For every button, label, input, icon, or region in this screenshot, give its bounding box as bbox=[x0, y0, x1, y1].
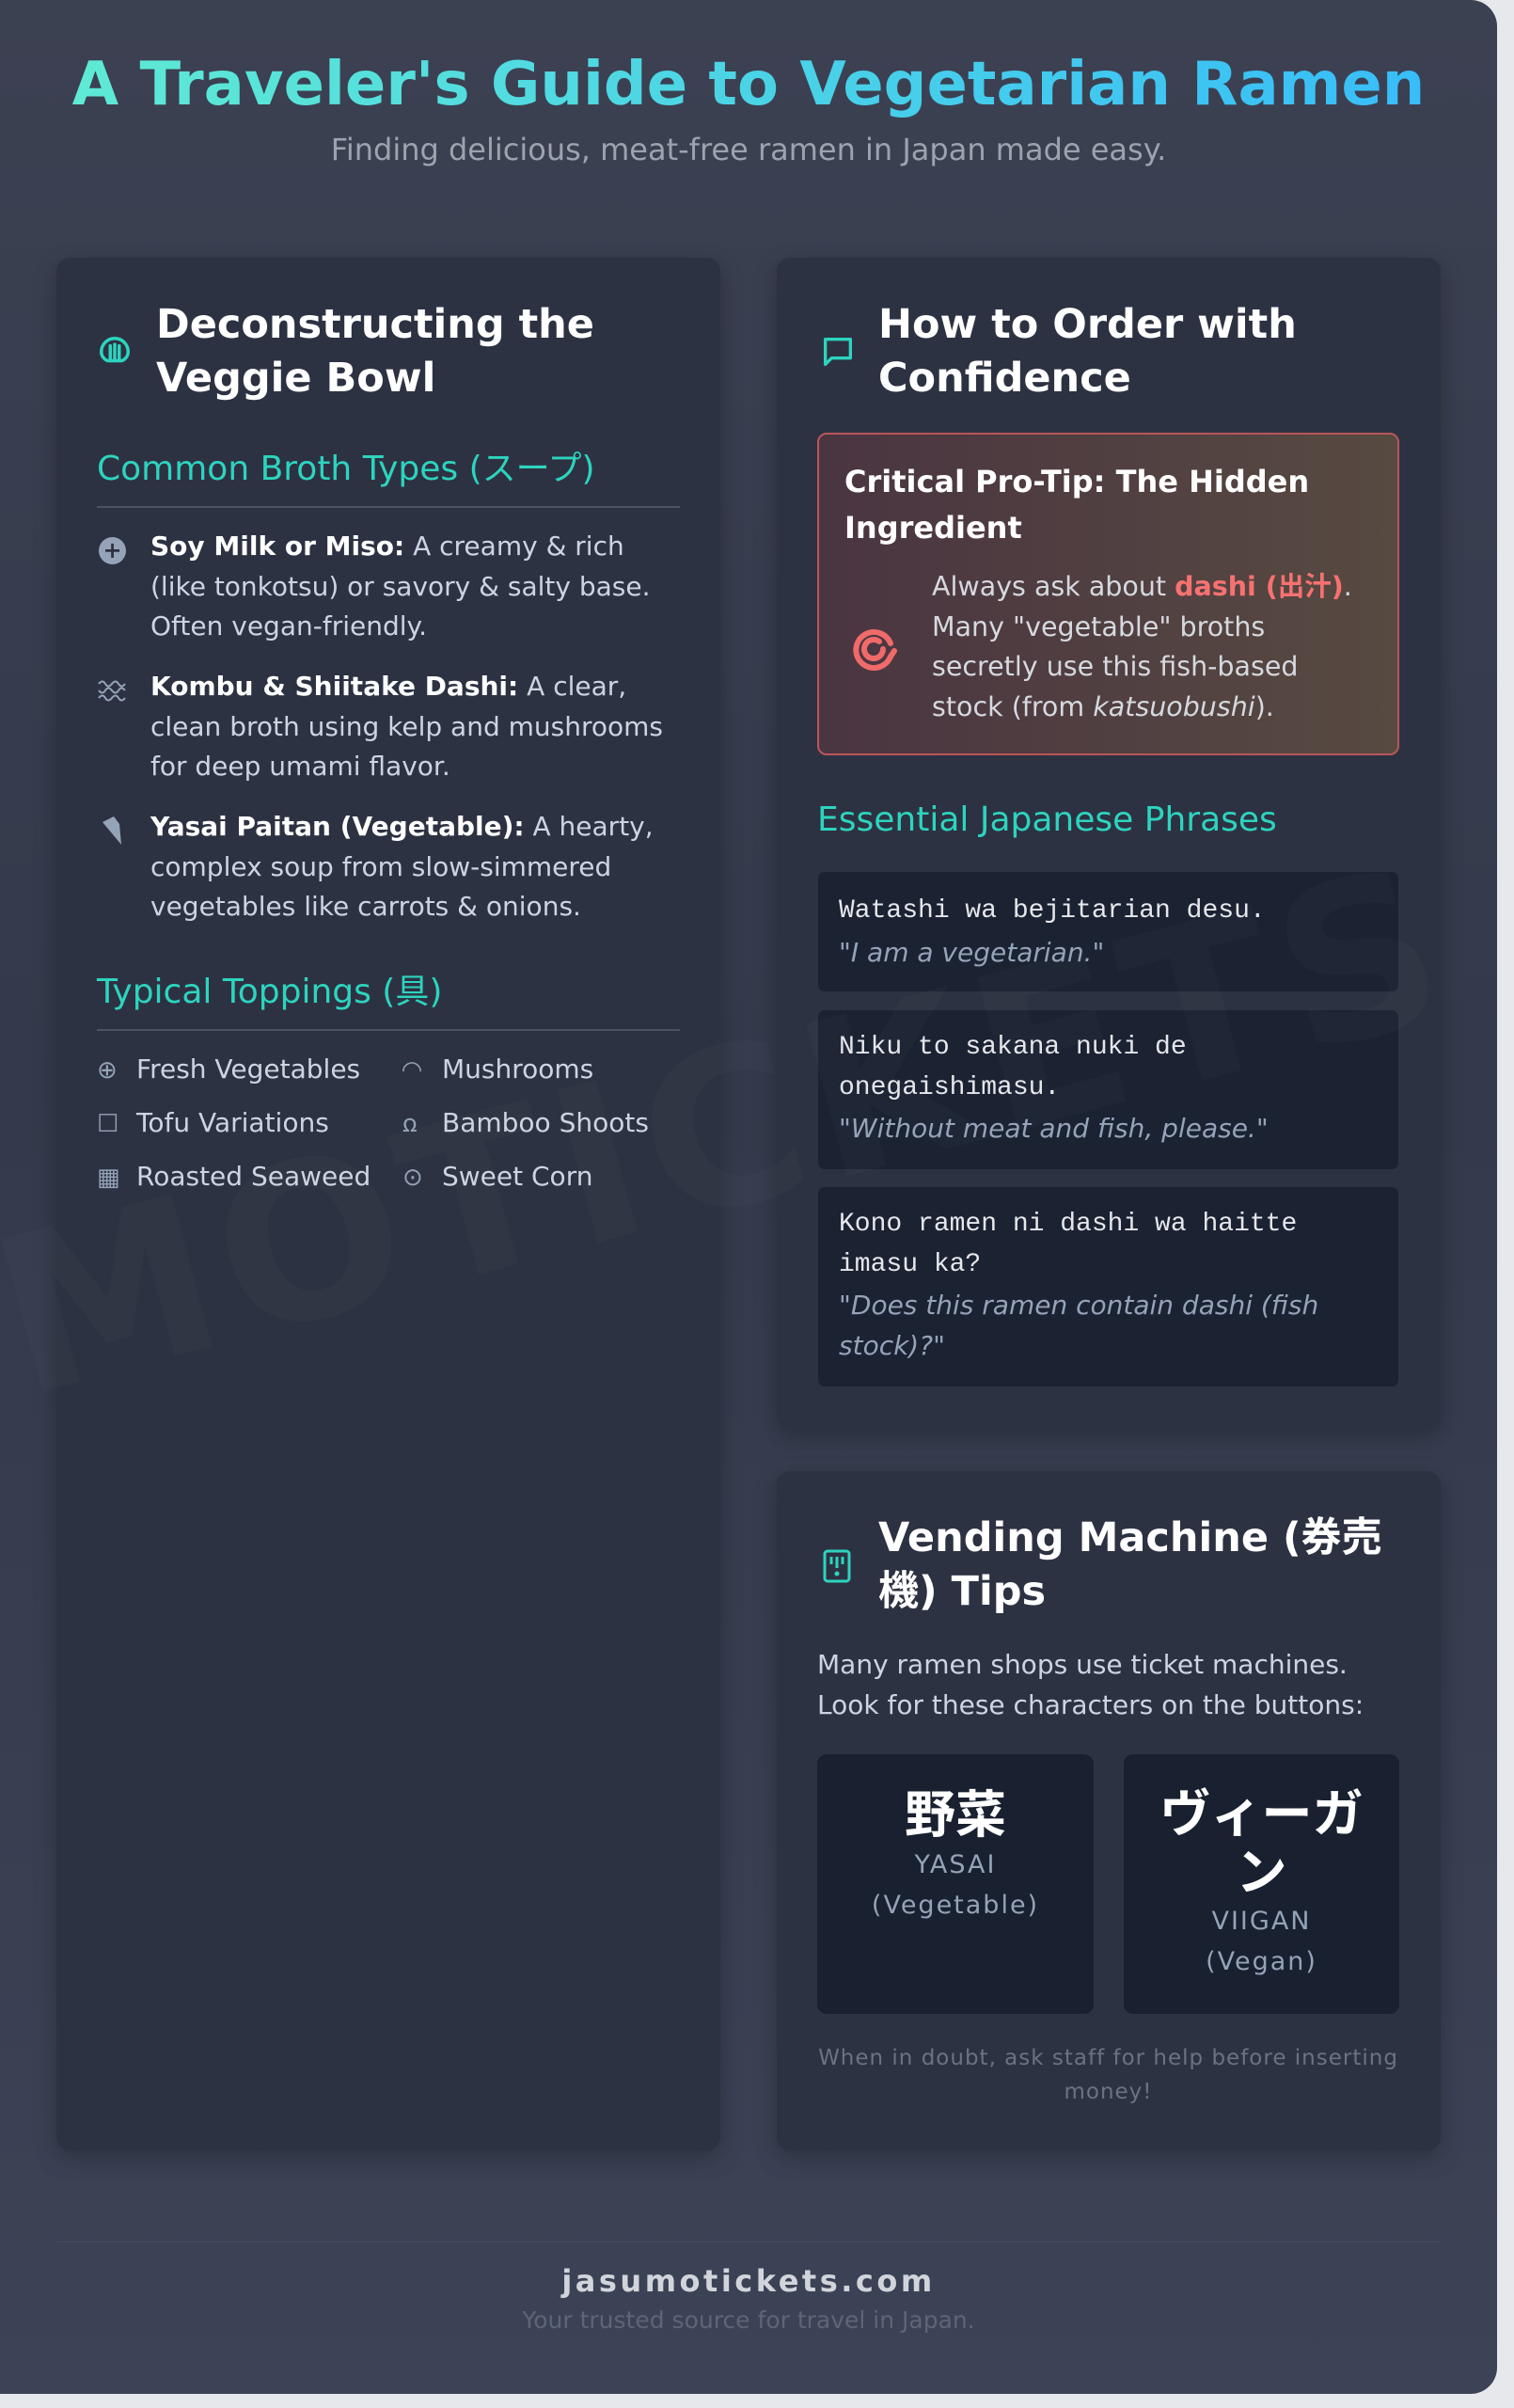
phrase 3: "Does this ramen contain dashi (fish bbox=[839, 1290, 1318, 1321]
topping: tofu: ☐ bbox=[97, 1110, 118, 1138]
topping: seaweed: ▦ bbox=[97, 1164, 120, 1192]
broth: soy milk: Soy Milk or Miso: A creamy & rich bbox=[150, 531, 624, 562]
broth: yasai paitan: complex soup from slow-simmered bbox=[150, 850, 611, 882]
callout title bbox=[844, 464, 1309, 546]
footer: jasumotickets.com bbox=[561, 2263, 936, 2299]
callout body: stock (from katsuobushi). bbox=[932, 690, 1274, 722]
heading: Confidence bbox=[878, 355, 1131, 402]
intro text: Look for these characters on the buttons: bbox=[817, 1689, 1364, 1719]
broth: yasai paitan: vegetables like carrots & onions. bbox=[150, 891, 581, 922]
icon: plus circle bbox=[99, 537, 126, 564]
topping: fresh vegetables: ⊕ bbox=[97, 1056, 118, 1085]
footnote: When in doubt, ask staff for help before inserting money! bbox=[818, 2046, 1398, 2104]
card: vegan bbox=[1124, 1754, 1399, 2014]
subtitle: Finding delicious, meat-free ramen in Japan made easy. bbox=[331, 132, 1166, 167]
subheading: toppings: Typical Toppings (具) bbox=[97, 973, 442, 1011]
callout: pro tip bbox=[817, 433, 1399, 755]
topping: corn: Sweet Corn bbox=[442, 1161, 592, 1192]
broth: kombu: for deep umami flavor. bbox=[150, 751, 450, 782]
phrase 2: onegaishimasu. bbox=[839, 1073, 1060, 1102]
toppings grid bbox=[97, 1054, 649, 1192]
callout body: Always ask about dashi (出汁). bbox=[932, 571, 1352, 602]
heading: 機) Tips bbox=[878, 1568, 1046, 1615]
broth: yasai paitan bbox=[103, 811, 654, 922]
heading: How to Order with bbox=[878, 301, 1297, 348]
phrase 1 bbox=[817, 871, 1399, 992]
topping: mushrooms: Mushrooms bbox=[442, 1054, 593, 1085]
intro text: Many ramen shops use ticket machines. bbox=[817, 1649, 1348, 1680]
phrase 2 bbox=[817, 1009, 1399, 1170]
broth: soy milk: (like tonkotsu) or savory & salty base. bbox=[150, 570, 651, 602]
phrase 1: Watashi wa bejitarian desu. bbox=[839, 896, 1266, 926]
heading bbox=[878, 301, 1297, 402]
broth: kombu: Kombu & Shiitake Dashi: A clear, bbox=[150, 671, 626, 702]
card: yasai bbox=[817, 1754, 1094, 2014]
broth list bbox=[98, 531, 663, 922]
topping: bamboo: Bamboo Shoots bbox=[442, 1107, 649, 1138]
footer: Your trusted source for travel in Japan. bbox=[522, 2306, 975, 2334]
phrase 3 bbox=[817, 1186, 1399, 1387]
subheading: broth types: Common Broth Types (スープ) bbox=[97, 450, 595, 488]
icon: leaf bbox=[103, 816, 121, 845]
icon: plus circle: + bbox=[103, 537, 122, 563]
heading: Veggie Bowl bbox=[156, 355, 435, 402]
icon: swirl bbox=[853, 629, 897, 671]
card: vegan: ヴィーガ bbox=[1160, 1772, 1364, 1846]
broth: yasai paitan: Yasai Paitan (Vegetable): A hearty, bbox=[150, 811, 654, 842]
topping: fresh vegetables: Fresh Vegetables bbox=[136, 1054, 360, 1085]
icon: speech bubble bbox=[824, 338, 852, 367]
card: yasai: 野菜 bbox=[905, 1773, 1006, 1847]
heading bbox=[878, 1514, 1382, 1615]
intro text bbox=[817, 1649, 1364, 1719]
icon: bowl bbox=[100, 337, 130, 363]
callout body bbox=[932, 571, 1352, 722]
card: vegan: (Vegan) bbox=[1206, 1947, 1317, 1976]
panel: how to order bbox=[777, 258, 1441, 1429]
broth: soy milk: Often vegan-friendly. bbox=[150, 610, 427, 642]
card: vegan: ン bbox=[1236, 1830, 1286, 1905]
heading bbox=[156, 301, 594, 402]
card: yasai: (Vegetable) bbox=[872, 1891, 1039, 1920]
footer bbox=[522, 2263, 975, 2334]
topping: tofu: Tofu Variations bbox=[136, 1107, 329, 1138]
card: vegan: VIIGAN bbox=[1211, 1907, 1311, 1936]
phrase 2: Niku to sakana nuki de bbox=[839, 1033, 1187, 1062]
phrase 2: "Without meat and fish, please." bbox=[839, 1113, 1269, 1144]
heading: Vending Machine (券売 bbox=[878, 1514, 1382, 1561]
panel: deconstructing the veggie bowl bbox=[56, 258, 720, 2150]
callout body: secretly use this fish-based bbox=[932, 651, 1298, 682]
phrase 3: stock)?" bbox=[839, 1330, 945, 1361]
topping: seaweed: Roasted Seaweed bbox=[136, 1161, 371, 1192]
phrase 3: Kono ramen ni dashi wa haitte bbox=[839, 1210, 1297, 1239]
panel: vending machine tips bbox=[777, 1471, 1441, 2150]
topping: corn: ⊙ bbox=[402, 1164, 423, 1192]
callout title: Critical Pro-Tip: The Hidden bbox=[844, 464, 1309, 499]
broth: soy milk bbox=[99, 531, 651, 642]
heading: Deconstructing the bbox=[156, 301, 594, 348]
topping: mushrooms: ◠ bbox=[402, 1056, 421, 1085]
icon: waves bbox=[98, 681, 126, 702]
phrase 1: "I am a vegetarian." bbox=[839, 937, 1104, 968]
broth: kombu bbox=[98, 671, 663, 782]
topping: bamboo: ꭥ bbox=[402, 1110, 418, 1138]
subheading: phrases: Essential Japanese Phrases bbox=[817, 800, 1277, 839]
callout title: Ingredient bbox=[844, 510, 1022, 546]
watermark: MOTICKETS bbox=[0, 818, 1475, 1447]
callout body: Many "vegetable" broths bbox=[932, 611, 1265, 642]
card: yasai: YASAI bbox=[915, 1850, 996, 1879]
broth: kombu: clean broth using kelp and mushrooms bbox=[150, 711, 663, 741]
title: A Traveler's Guide to Vegetarian Ramen bbox=[72, 50, 1425, 119]
icon: ticket machine bbox=[824, 1550, 850, 1582]
phrase 3: imasu ka? bbox=[839, 1250, 981, 1279]
